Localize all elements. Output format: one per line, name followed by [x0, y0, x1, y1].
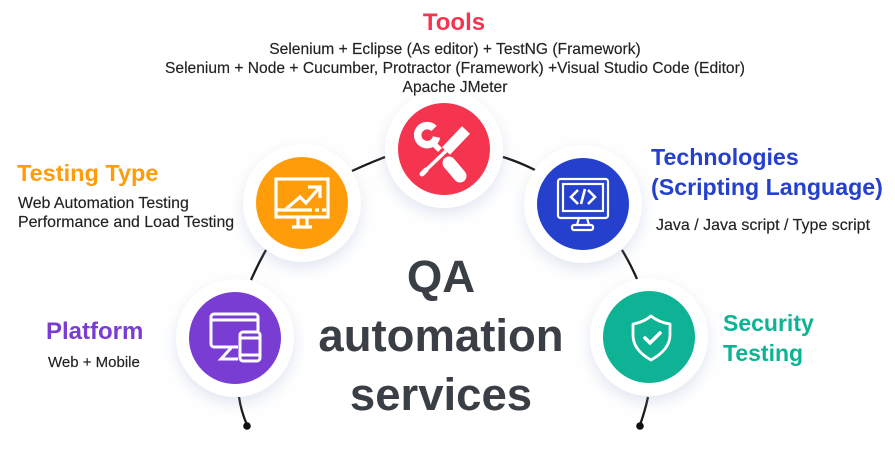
- text: tools list: Apache JMeter: [403, 79, 507, 96]
- text: testing type list: Web Automation Testing: [18, 195, 189, 212]
- end dots: [243, 422, 644, 430]
- heading: security testing: [723, 310, 814, 366]
- title: QA automation services: QA: [407, 251, 475, 302]
- title: QA automation services: [318, 251, 564, 420]
- heading: tools: Tools: [423, 9, 485, 36]
- text: tools list: Selenium + Node + Cucumber, Protractor (Framework) +Visual Studio Code (Editor): [165, 60, 745, 77]
- text: technologies list: Java / Java script / Type script: [656, 217, 870, 234]
- heading: testing type: Testing Type: [17, 160, 158, 186]
- icon: tools: [385, 90, 503, 208]
- heading: technologies: Technologies: [651, 144, 799, 170]
- icon: platform devices: [176, 279, 294, 397]
- heading: security testing: Testing: [723, 340, 803, 366]
- heading: platform: Platform: [46, 318, 143, 345]
- icon: testing type monitor chart: [243, 144, 361, 262]
- text: tools list: [165, 41, 745, 96]
- heading: security testing: Security: [723, 310, 814, 336]
- title: QA automation services: automation: [318, 310, 564, 361]
- text: testing type list: Performance and Load Testing: [18, 214, 234, 231]
- heading: technologies: [651, 144, 883, 200]
- icon: technologies monitor code: [524, 145, 642, 263]
- text: tools list: Selenium + Eclipse (As editor) + TestNG (Framework): [269, 41, 641, 58]
- text: testing type list: [18, 195, 234, 231]
- text: platform list: Web + Mobile: [48, 354, 140, 371]
- arc connectors: [239, 157, 648, 425]
- icon: security shield: [590, 278, 708, 396]
- title: QA automation services: services: [350, 369, 532, 420]
- heading: technologies: (Scripting Language): [651, 174, 883, 200]
